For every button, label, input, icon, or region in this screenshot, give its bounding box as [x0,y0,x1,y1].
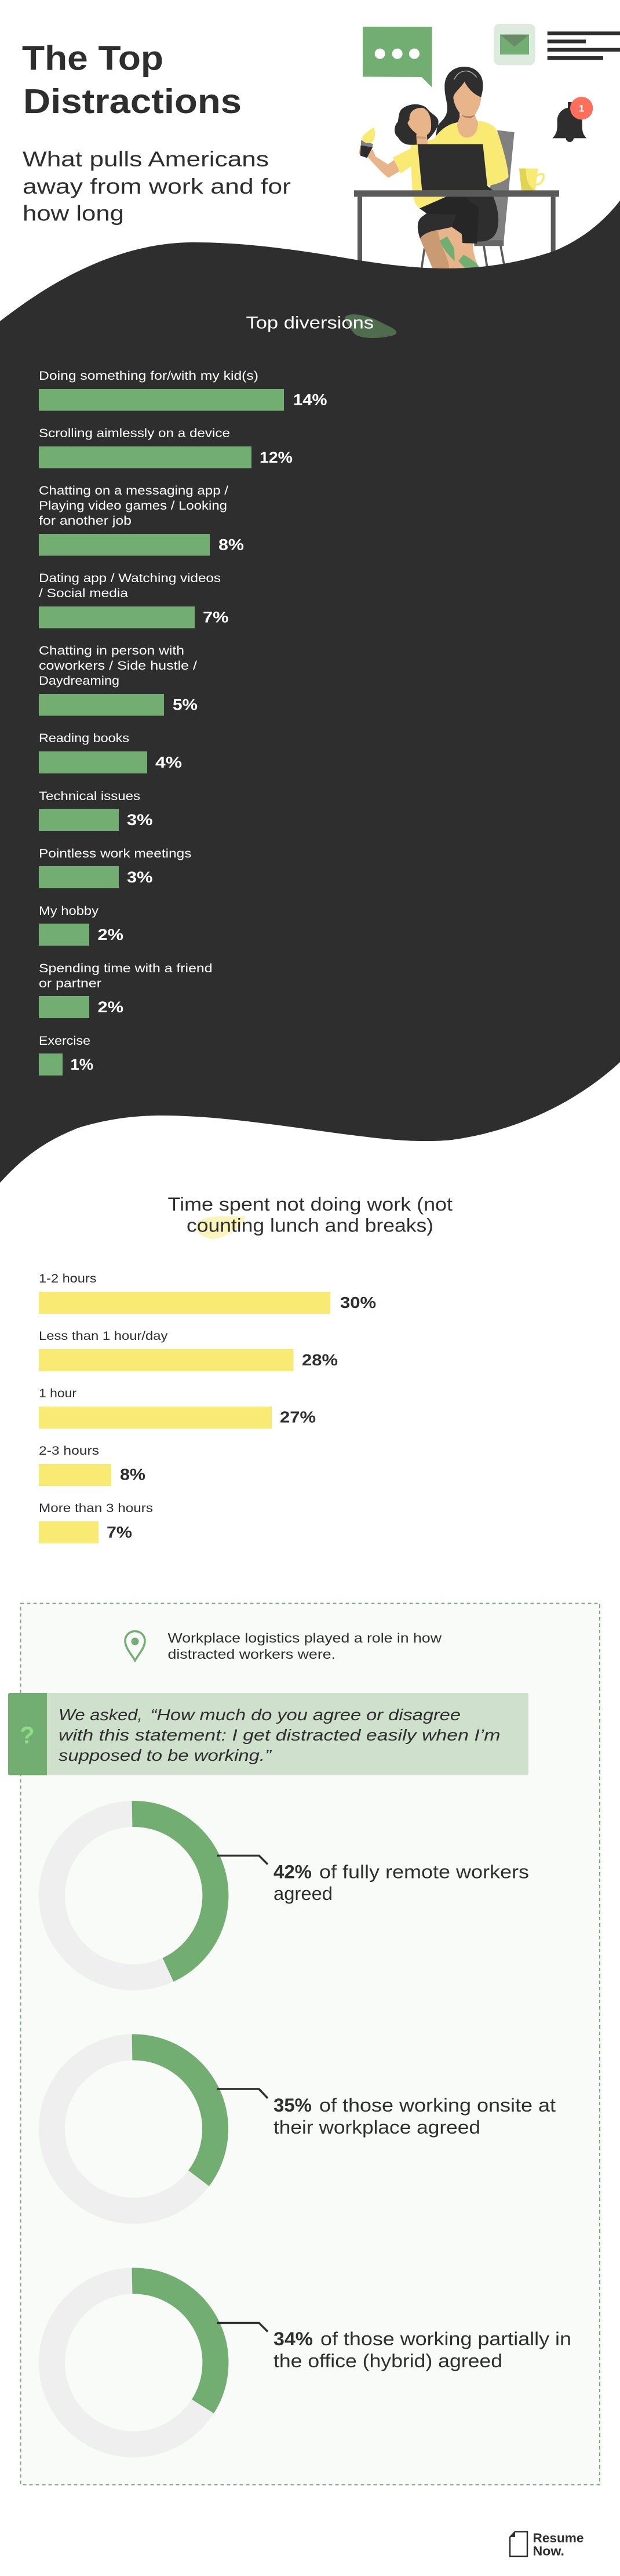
row: 1-2 hours 30% [39,1272,376,1314]
row: more than 3 hours 7%: 7% [107,1523,132,1541]
intro text [168,1630,442,1662]
icon: mail [494,24,535,65]
row: 1-2 hours 30%: 30% [340,1294,376,1311]
woman skirt and legs [418,196,498,268]
donut chart: 42% fully remote [52,1814,529,1977]
icon: yellow blob accent [196,1216,245,1239]
kid hair [395,104,439,145]
row: 1 hour 27%: 27% [280,1408,316,1426]
illustration: mother and child at desk [354,24,620,268]
laptop [418,144,493,190]
stat text: the office (hybrid) agreed [273,2350,502,2371]
stat text [273,2095,556,2138]
row: kids 14%: 14% [293,391,327,408]
row: hobby 2%: My hobby [39,904,99,918]
icon: document [510,2531,527,2556]
subtitle [23,147,291,225]
donut chart: 34% hybrid [52,2281,571,2444]
woman face [453,82,481,137]
row: chatting in person 5% [39,644,198,715]
logo: Resume Now: Resume [533,2531,584,2545]
bar chart: time spent not working [39,1272,376,1543]
stat text: of those working onsite at [319,2095,556,2116]
question banner: We asked, [59,1706,143,1724]
question banner: supposed to be working.” [59,1746,272,1764]
row: 1 hour 27% [39,1387,316,1429]
row: meetings 3%: 3% [127,869,153,886]
row: 1 hour 27%: 1 hour [39,1387,76,1400]
row: kids 14% [39,369,327,410]
row: meetings 3% [39,847,191,888]
kid face [407,108,431,145]
question banner: “How much do you agree or disagree [151,1706,461,1724]
stat text: of fully remote workers [319,1861,529,1882]
row: reading 4%: 4% [155,754,182,771]
row: chatting in person 5%: 5% [173,696,198,713]
row: meetings 3%: Pointless work meetings [39,847,191,860]
logo: Resume Now [510,2531,584,2558]
panel: dark wave background [0,201,620,1183]
stat text [273,1861,529,1904]
row: friend 2%: or partner [39,977,101,990]
heading: time spent: counting lunch and breaks) [187,1215,433,1236]
row: messaging 8% [39,484,244,555]
row: dating 7%: / Social media [39,587,128,600]
connector line [217,2089,268,2098]
row: hobby 2%: 2% [97,926,123,943]
subtitle: how long [23,202,124,225]
row: chatting in person 5%: Daydreaming [39,674,119,688]
donut chart: 35% onsite [52,2047,556,2211]
row: 2-3 hours 8% [39,1444,145,1486]
stat text: their workplace agreed [273,2117,480,2138]
row: technical 3% [39,790,153,831]
icon: text lines [548,31,620,60]
kid arm and ice cream [359,127,422,190]
row: scrolling 12% [39,427,293,468]
stat text: of those working partially in [320,2328,571,2349]
row: dating 7%: 7% [203,609,228,626]
connector line [217,1855,268,1865]
row: technical 3%: Technical issues [39,790,140,803]
row: dating 7%: Dating app / Watching videos [39,572,221,585]
row: more than 3 hours 7%: More than 3 hours [39,1502,153,1515]
row: friend 2% [39,962,212,1018]
icon: notification bell [552,97,593,142]
row: messaging 8%: for another job [39,514,132,528]
row: friend 2%: 2% [97,998,123,1016]
row: less than 1 hour 28% [39,1329,338,1371]
woman shirt [411,121,509,208]
icon: green leaf accent [345,314,396,338]
stat text: 35% [273,2095,312,2116]
logo: Resume Now: Now. [533,2544,564,2558]
row: reading 4% [39,732,182,773]
mug [519,169,544,190]
row: exercise 1%: Exercise [39,1034,90,1048]
row: less than 1 hour 28%: Less than 1 hour/day [39,1329,168,1343]
row: kids 14%: Doing something for/with my kid(s) [39,369,258,383]
icon: notification bell: 1 [579,103,584,114]
row: hobby 2% [39,904,123,946]
question banner [8,1693,528,1775]
stat text [273,2328,571,2371]
heading: top diversions: Top diversions [246,313,374,333]
heading: time spent: Time spent not doing work (not [168,1194,453,1215]
row: technical 3%: 3% [127,811,153,829]
row: exercise 1%: 1% [71,1056,93,1073]
subtitle: What pulls Americans [23,147,269,171]
stat text: 34% [273,2328,313,2349]
question banner: with this statement: I get distracted easily when I’m [59,1726,501,1744]
row: 2-3 hours 8%: 8% [120,1466,145,1484]
title: The Top [22,39,163,78]
row: chatting in person 5%: Chatting in person with [39,644,184,657]
stat text: agreed [273,1883,333,1904]
heading: time spent [168,1194,453,1236]
row: more than 3 hours 7% [39,1502,153,1543]
desk [354,190,559,263]
woman hair [436,67,483,137]
question banner: ? [20,1721,35,1749]
row: 2-3 hours 8%: 2-3 hours [39,1444,99,1458]
chair [422,130,515,268]
row: scrolling 12%: Scrolling aimlessly on a device [39,427,230,440]
row: less than 1 hour 28%: 28% [302,1351,338,1369]
intro text: Workplace logistics played a role in how [168,1630,442,1645]
row: dating 7% [39,572,228,628]
icon: location pin [125,1632,145,1661]
subtitle: away from work and for [23,175,291,198]
row: exercise 1% [39,1034,93,1076]
row: friend 2%: Spending time with a friend [39,962,212,975]
title [22,39,242,121]
row: reading 4%: Reading books [39,732,129,745]
row: messaging 8%: Playing video games / Looking [39,499,227,513]
row: scrolling 12%: 12% [260,449,293,466]
row: messaging 8%: Chatting on a messaging app / [39,484,228,497]
intro text: distracted workers were. [168,1647,335,1662]
title: Distractions [23,82,242,121]
bar chart: top diversions [39,369,327,1076]
row: chatting in person 5%: coworkers / Side hustle / [39,659,197,673]
stat text: 42% [273,1861,312,1882]
connector line [217,2323,268,2332]
row: 1-2 hours 30%: 1-2 hours [39,1272,96,1285]
row: messaging 8%: 8% [218,536,244,554]
icon: speech bubble [363,27,432,88]
panel: workplace logistics [8,1604,600,2485]
